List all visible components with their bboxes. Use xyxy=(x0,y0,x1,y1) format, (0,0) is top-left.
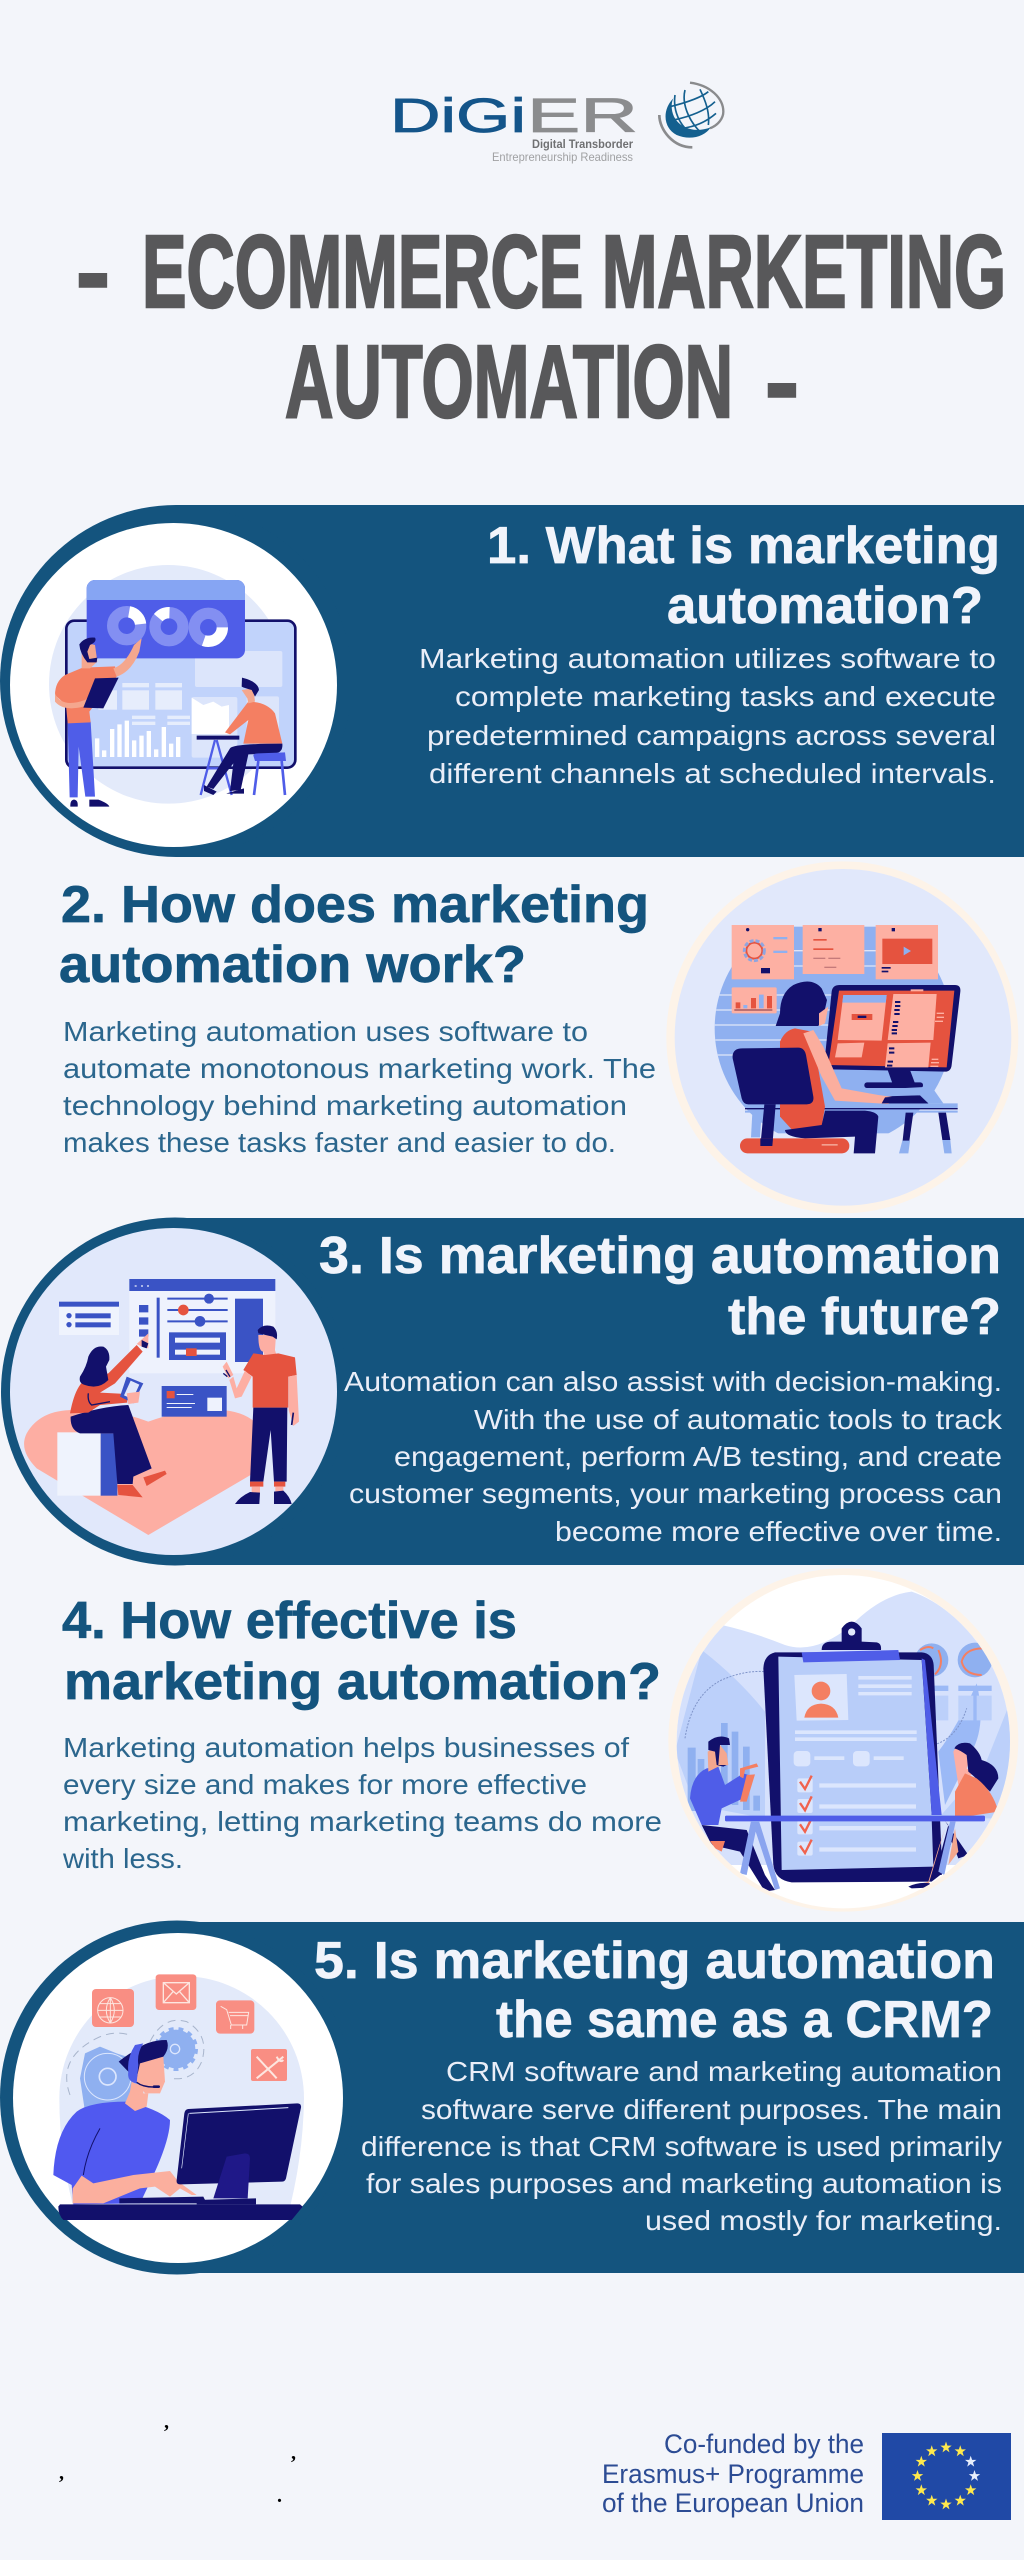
heading 3: 3. Is marketing automation xyxy=(319,1227,1001,1285)
body text 3: become more effective over time. xyxy=(555,1516,1002,1547)
footer: co-funding text: Co-funded by the xyxy=(664,2429,864,2459)
illustration: support agent at computer xyxy=(53,1974,304,2220)
logo wordmark: ER xyxy=(527,90,638,143)
heading 4: 4. How effective is xyxy=(62,1592,517,1650)
heading 4: marketing automation? xyxy=(64,1653,661,1711)
body text 5 xyxy=(361,2056,1002,2236)
panel: section 3 band xyxy=(1,1218,1024,1566)
body text 1: predetermined campaigns across several xyxy=(427,720,996,751)
body text 4: Marketing automation helps businesses of xyxy=(63,1732,629,1763)
heading 3: the future? xyxy=(728,1288,1001,1346)
circle: illustration 3 background xyxy=(10,1228,337,1555)
stray punctuation marks: . xyxy=(277,2485,282,2507)
logo globe icon xyxy=(659,83,723,147)
panel: section 4 xyxy=(62,1568,1018,1912)
body text 4: every size and makes for more effective xyxy=(63,1769,587,1800)
body text 3 xyxy=(344,1366,1002,1547)
stray punctuation marks: , xyxy=(291,2442,296,2464)
body text 2: automate monotonous marketing work. The xyxy=(63,1053,656,1084)
heading 5 xyxy=(314,1932,995,2049)
body text 1: complete marketing tasks and execute xyxy=(455,681,996,712)
heading 4 xyxy=(62,1592,661,1711)
title: - xyxy=(76,214,110,329)
heading 2: automation work? xyxy=(59,936,526,994)
logo wordmark xyxy=(390,90,638,143)
body text 2: technology behind marketing automation xyxy=(63,1090,627,1121)
body text 3: Automation can also assist with decision-making. xyxy=(344,1366,1002,1397)
body text 5: difference is that CRM software is used primarily xyxy=(361,2131,1002,2162)
circle: illustration 5 background xyxy=(13,1933,343,2263)
logo wordmark: DiGi xyxy=(390,90,526,143)
body text 3: With the use of automatic tools to track xyxy=(474,1404,1002,1435)
body text 1: different channels at scheduled intervals. xyxy=(429,758,996,789)
heading 5: 5. Is marketing automation xyxy=(314,1932,995,1990)
body text 4: with less. xyxy=(62,1843,183,1874)
footer: co-funding text: Erasmus+ Programme xyxy=(602,2459,864,2489)
logo: DIGIER xyxy=(390,83,723,164)
stray punctuation marks: , xyxy=(59,2462,64,2484)
panel: section 5 band xyxy=(0,1920,1024,2274)
body text 3: engagement, perform A/B testing, and create xyxy=(394,1441,1002,1472)
body text 3: customer segments, your marketing process can xyxy=(349,1478,1002,1509)
body text 5: used mostly for marketing. xyxy=(645,2205,1002,2236)
logo tagline xyxy=(492,137,633,164)
icon: EU flag xyxy=(882,2433,1011,2520)
body text 2: makes these tasks faster and easier to do. xyxy=(63,1127,616,1158)
body text 1: Marketing automation utilizes software to xyxy=(419,643,996,674)
logo tagline: Entrepreneurship Readiness xyxy=(492,150,633,164)
heading 3 xyxy=(319,1227,1001,1346)
panel: section 1 band xyxy=(0,505,1024,857)
heading 1 xyxy=(487,517,1000,635)
body text 5: software serve different purposes. The main xyxy=(421,2094,1002,2125)
illustration: two people configuring dashboard xyxy=(24,1279,299,1535)
body text 5: CRM software and marketing automation xyxy=(446,2056,1002,2087)
title: AUTOMATION xyxy=(285,324,733,439)
body text 1 xyxy=(419,643,996,789)
body text 5: for sales purposes and marketing automation is xyxy=(366,2168,1002,2199)
body text 4: marketing, letting marketing teams do more xyxy=(63,1806,662,1837)
footer: co-funding text: of the European Union xyxy=(602,2488,864,2518)
stray punctuation marks: , xyxy=(164,2411,169,2433)
heading 1: automation? xyxy=(667,577,983,635)
footer: co-funding text xyxy=(602,2429,864,2518)
body text 4 xyxy=(62,1732,662,1874)
heading 2 xyxy=(59,876,649,994)
body text 2: Marketing automation uses software to xyxy=(63,1016,588,1047)
title: - xyxy=(765,324,799,439)
illustration: woman at computer xyxy=(666,861,1018,1213)
body text 2 xyxy=(63,1016,656,1158)
illustration: team analysing dashboard xyxy=(49,565,295,807)
stray punctuation marks xyxy=(59,2411,296,2507)
illustration: clipboard profile review xyxy=(668,1568,1018,1912)
heading 2: 2. How does marketing xyxy=(61,876,649,934)
heading 1: 1. What is marketing xyxy=(487,517,1000,575)
title xyxy=(76,214,1006,439)
heading 5: the same as a CRM? xyxy=(496,1991,993,2049)
logo tagline: Digital Transborder xyxy=(532,137,633,151)
circle: illustration 1 background xyxy=(10,523,337,847)
panel: section 2 xyxy=(59,861,1018,1213)
